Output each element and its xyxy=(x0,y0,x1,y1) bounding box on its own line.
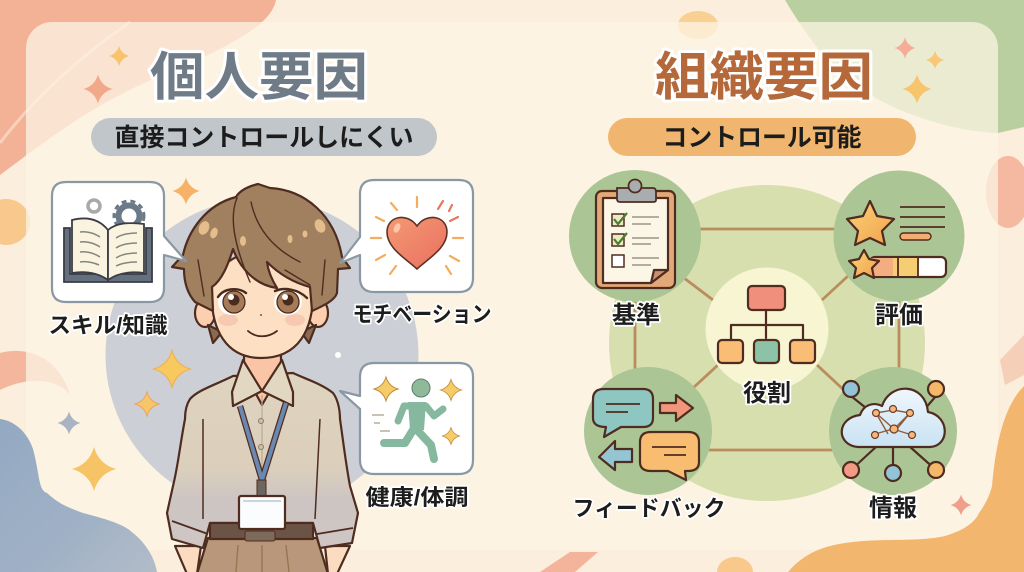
node: 基準 xyxy=(569,170,701,302)
network connector lines xyxy=(635,229,899,450)
icon: runner with sparkles xyxy=(372,377,462,459)
ears xyxy=(195,299,215,327)
blob: bottom right orange xyxy=(788,386,1024,572)
bubble: motivation xyxy=(340,180,473,292)
icon: chat bubbles and arrows xyxy=(593,389,699,480)
person xyxy=(167,184,358,572)
nape tufts xyxy=(208,325,316,343)
collar xyxy=(232,360,293,406)
label: 基準: 基準 xyxy=(612,302,660,329)
pill: コントロール可能: コントロール可能 xyxy=(662,124,862,152)
label: 情報: 情報 xyxy=(869,495,917,522)
icon: open book and gears xyxy=(64,200,152,282)
gray backdrop circle xyxy=(106,198,418,512)
label: 健康/体調: 健康/体調 xyxy=(366,485,468,510)
pill: 直接コントロールしにくい xyxy=(91,118,437,156)
shirt xyxy=(167,373,358,548)
label: フィードバック: フィードバック xyxy=(572,496,726,521)
blob: bottom left blue xyxy=(0,419,157,572)
label: モチベーション: モチベーション xyxy=(352,302,492,327)
node: フィードバック xyxy=(584,367,712,495)
arms xyxy=(175,546,350,572)
hair xyxy=(172,184,350,311)
nose and mouth xyxy=(260,314,262,316)
title: 組織要因: 組織要因 xyxy=(655,49,873,107)
sparkles: left xyxy=(58,46,341,491)
icon: clipboard checklist xyxy=(596,180,675,288)
icon: stars and rating bar xyxy=(847,201,946,278)
node: 情報 xyxy=(829,367,957,495)
bubble: skill and knowledge xyxy=(52,182,186,302)
icon: heart with rays xyxy=(371,197,463,274)
pill: コントロール可能 xyxy=(608,118,916,156)
icon: org chart xyxy=(718,286,815,363)
blush xyxy=(218,314,238,326)
node: 役割 xyxy=(706,268,828,390)
label: 役割: 役割 xyxy=(743,380,791,407)
node: 評価 xyxy=(834,170,964,302)
lanyard xyxy=(240,403,286,480)
neck xyxy=(244,352,281,405)
trousers xyxy=(197,538,328,572)
title: 個人要因: 個人要因 xyxy=(150,49,368,107)
belt xyxy=(210,523,313,539)
label: スキル/知識: スキル/知識 xyxy=(48,313,168,338)
id card xyxy=(239,496,285,529)
bubble: health xyxy=(340,363,473,474)
eyes xyxy=(218,289,246,315)
icon: cloud network xyxy=(842,381,945,481)
sparkles: right xyxy=(894,38,972,516)
label: 評価: 評価 xyxy=(875,302,923,329)
pill: 直接コントロールしにくい: 直接コントロールしにくい xyxy=(114,124,414,152)
face xyxy=(212,251,313,358)
light orbit circle xyxy=(609,185,925,501)
